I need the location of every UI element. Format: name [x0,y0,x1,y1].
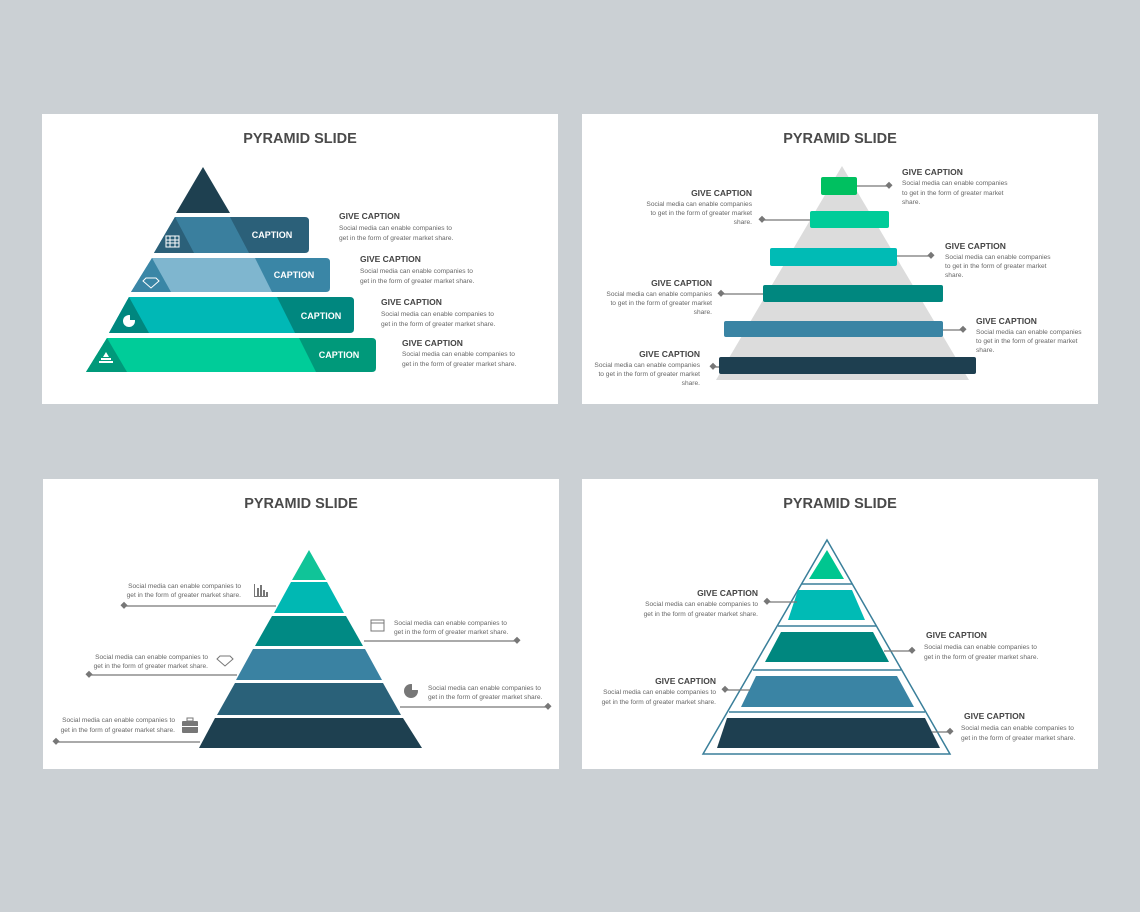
caption 2d [606,278,713,316]
caption 2e: GIVE CAPTION [976,316,1037,326]
caption 1c: Social media can enable companies to [381,311,494,318]
caption 1a: get in the form of greater market share. [339,235,454,242]
caption 2c: Social media can enable companies [945,254,1051,261]
band 1: CAPTION [252,230,292,240]
pyramid fills [717,550,940,748]
caption 2a: share. [902,199,920,206]
caption 4d: Social media can enable companies to [961,725,1074,732]
caption 2b: Social media can enable companies [646,201,753,208]
caption 3d: get in the form of greater market share. [428,694,543,701]
caption 3c [94,654,208,670]
gray pyramid background [716,166,969,380]
band 3: CAPTION [301,311,341,321]
caption 1b: get in the form of greater market share. [360,278,475,285]
connectors 3 [52,602,552,745]
panel: slide 3 layered pyramid [43,479,559,769]
caption 4b: GIVE CAPTION [926,630,987,640]
caption 2c: to get in the form of greater market [945,263,1047,270]
caption 4c: Social media can enable companies to [603,689,716,696]
caption 1c [381,297,496,328]
caption 2b: to get in the form of greater market [650,210,752,217]
caption 1d: Social media can enable companies to [402,351,515,358]
caption 4d: GIVE CAPTION [964,711,1025,721]
pyramid top triangle [176,167,230,213]
panel: slide 1 banded pyramid [42,114,558,404]
caption 3b [394,620,509,636]
title 1: PYRAMID SLIDE [243,131,357,147]
caption 2a: GIVE CAPTION [902,167,963,177]
caption 2b: share. [734,219,752,226]
caption 2c: GIVE CAPTION [945,241,1006,251]
caption 3c: get in the form of greater market share. [94,663,208,670]
caption 3a: Social media can enable companies to [128,583,241,590]
caption 1d: GIVE CAPTION [402,338,463,348]
title 3: PYRAMID SLIDE [244,496,358,512]
caption 2e [976,316,1082,354]
caption 2d: GIVE CAPTION [651,278,712,288]
caption 2f: Social media can enable companies [594,362,701,369]
connectors 4 [721,598,954,735]
bars [719,177,976,374]
caption 2a: Social media can enable companies [902,180,1008,187]
caption 2d: Social media can enable companies [606,291,713,298]
caption 3e [61,717,175,734]
caption 1c: get in the form of greater market share. [381,321,496,328]
icon: calendar [166,236,179,247]
caption 2f [594,349,701,387]
caption 2a [902,167,1008,206]
caption 4a: GIVE CAPTION [697,588,758,598]
caption 2e: Social media can enable companies [976,329,1082,336]
icon: pie 3 [404,683,419,698]
caption 1a: Social media can enable companies to [339,225,452,232]
caption 1a [339,211,454,242]
caption 2b [646,188,753,226]
icon: calendar 3 [371,620,384,631]
caption 2c: share. [945,272,963,279]
caption 3b: Social media can enable companies to [394,620,507,627]
caption 2f: share. [682,380,700,387]
caption 4b: Social media can enable companies to [924,644,1037,651]
caption 1b: Social media can enable companies to [360,268,473,275]
caption 3a: get in the form of greater market share. [127,592,241,599]
caption 4c: GIVE CAPTION [655,676,716,686]
caption 2e: share. [976,347,994,354]
caption 2f: to get in the form of greater market [598,371,700,378]
band 4: CAPTION [319,350,359,360]
icon: diamond 3 [217,656,233,666]
band 2 [131,258,330,292]
caption 1a: GIVE CAPTION [339,211,400,221]
caption 4c: get in the form of greater market share. [602,699,716,706]
caption 3a [127,583,241,599]
caption 4a: Social media can enable companies to [645,601,758,608]
caption 4a [644,588,758,618]
icon: pyramid [99,352,113,363]
band 4 [86,338,376,372]
caption 4a: get in the form of greater market share. [644,611,758,618]
caption 1b: GIVE CAPTION [360,254,421,264]
caption 3d: Social media can enable companies to [428,685,541,692]
pyramid outline [703,540,950,754]
icon: pie chart [123,314,136,327]
band 2: CAPTION [274,270,314,280]
caption 3d [428,685,543,701]
caption 2a: to get in the form of greater market [902,190,1004,197]
caption 1b [360,254,475,285]
icon: briefcase [182,718,198,733]
caption 1d: get in the form of greater market share. [402,361,517,368]
caption 2d: share. [694,309,712,316]
panel: slide 4 outlined pyramid [582,479,1098,769]
panel: slide 2 bar pyramid [582,114,1098,404]
title 2: PYRAMID SLIDE [783,131,897,147]
title 4: PYRAMID SLIDE [783,496,897,512]
caption 2f: GIVE CAPTION [639,349,700,359]
caption 3e: Social media can enable companies to [62,717,175,724]
caption 4c [602,676,716,706]
caption 2e: to get in the form of greater market [976,338,1078,345]
caption 2b: GIVE CAPTION [691,188,752,198]
band 1 [154,217,309,253]
icon: diamond [143,278,159,288]
caption 3e: get in the form of greater market share. [61,727,175,734]
caption 3c: Social media can enable companies to [95,654,208,661]
caption 4d: get in the form of greater market share. [961,735,1076,742]
caption 3b: get in the form of greater market share. [394,629,509,636]
caption 4b: get in the form of greater market share. [924,654,1039,661]
icon: bar chart [254,584,268,597]
band 3 [109,297,354,333]
caption 4d [961,711,1076,742]
pyramid layers [199,550,422,748]
caption 1d [402,338,517,368]
connectors [709,182,967,370]
caption 4b [924,630,1039,661]
caption 1c: GIVE CAPTION [381,297,442,307]
caption 2d: to get in the form of greater market [610,300,712,307]
caption 2c [945,241,1051,279]
